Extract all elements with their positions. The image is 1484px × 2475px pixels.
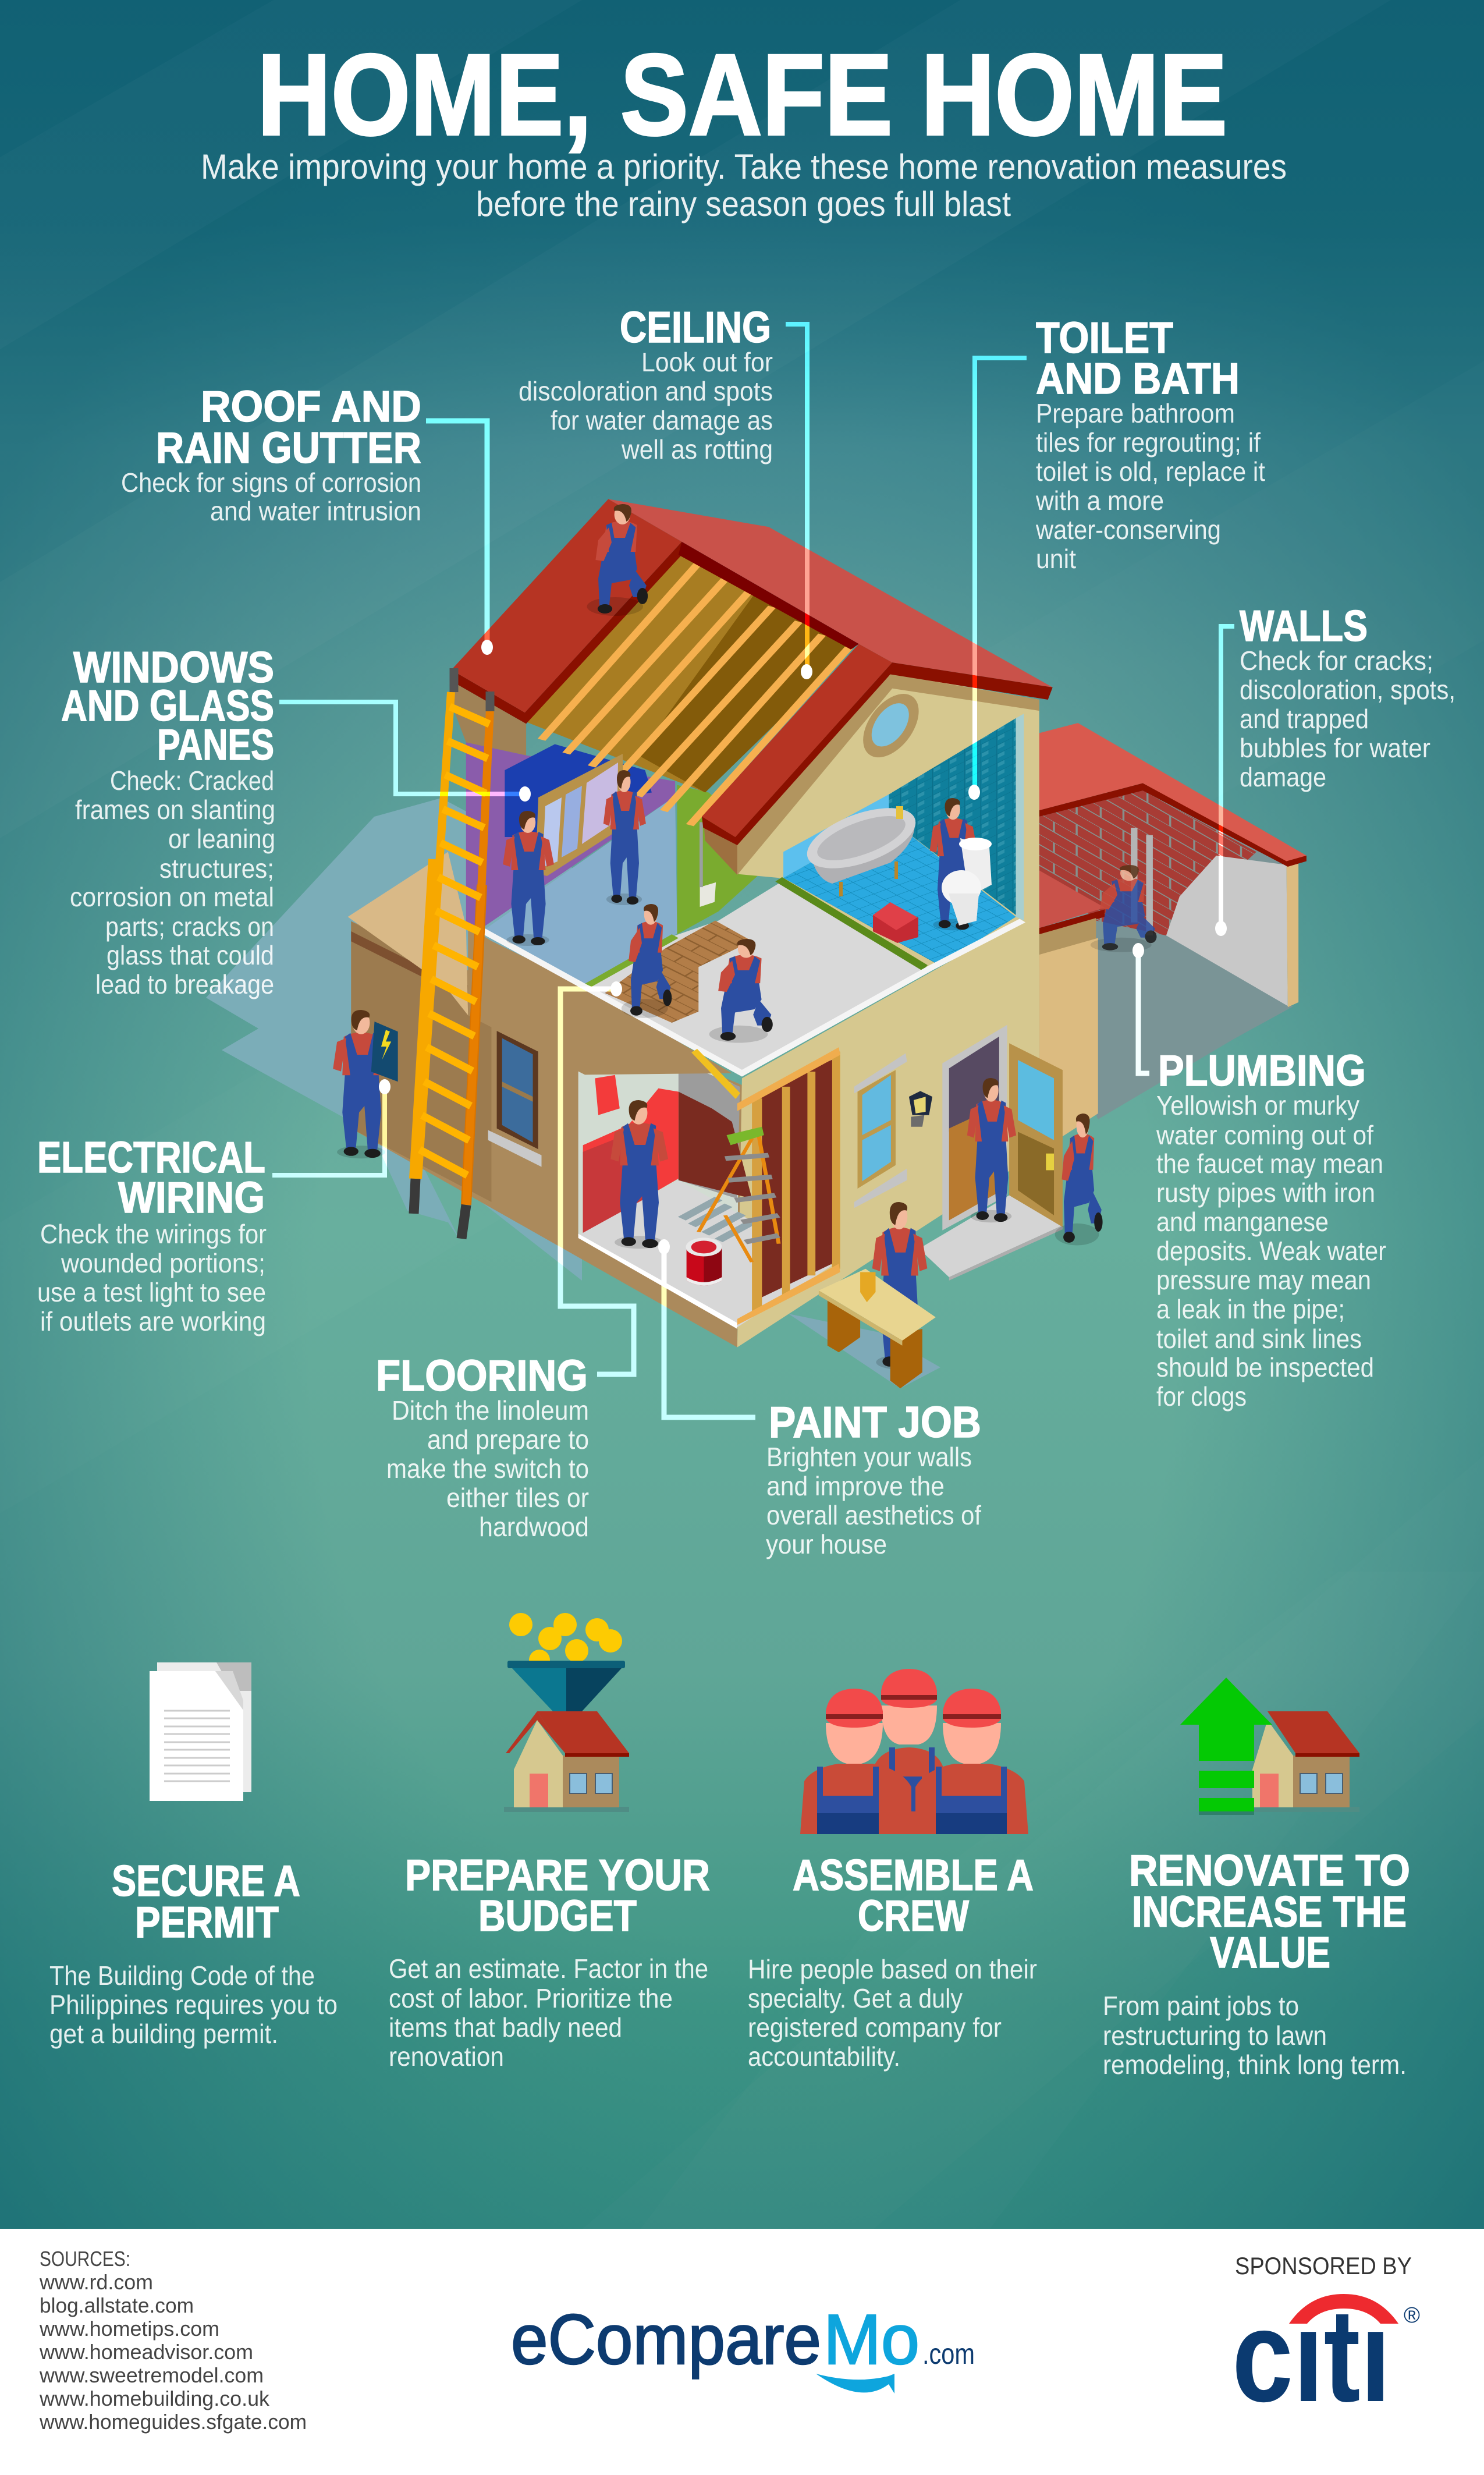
callout: plumbing: deposits. Weak water xyxy=(1156,1236,1386,1266)
cream gable wall xyxy=(735,673,1039,971)
step: renovate to increase the value: restructuring to lawn xyxy=(1103,2020,1327,2051)
logo: citi: citi xyxy=(1232,2282,1391,2429)
blue patch xyxy=(505,744,652,837)
door leaf xyxy=(1009,1043,1063,1227)
electrical box xyxy=(371,1022,398,1082)
callout: roof and rain gutter: Check for signs of corrosion xyxy=(121,467,421,498)
purple wall xyxy=(466,742,675,926)
callout: plumbing: the faucet may mean xyxy=(1156,1148,1383,1179)
crew: right xyxy=(915,1689,1028,1834)
callout: toilet and bath: unit xyxy=(1036,544,1076,574)
callout: windows and glass panes: structures; xyxy=(159,853,274,884)
wood flooring xyxy=(605,921,752,1023)
callout: windows and glass panes: Check: Cracked xyxy=(110,765,274,796)
step: assemble a crew: CREW xyxy=(858,1891,969,1940)
second storey xyxy=(348,499,1053,1075)
worker: floor 1 xyxy=(622,904,672,1018)
worker: bath xyxy=(930,798,977,930)
callout: flooring: either tiles or xyxy=(446,1483,589,1513)
ledge xyxy=(348,852,468,1015)
callout: paint job: overall aesthetics of xyxy=(766,1500,981,1530)
callout: walls: damage xyxy=(1240,762,1326,792)
worker: kneeling by door xyxy=(1055,1114,1103,1246)
sponsored by: SPONSORED BY xyxy=(1235,2252,1412,2279)
crew: left xyxy=(800,1689,911,1834)
white floor rim xyxy=(481,921,1023,1073)
callout: windows and glass panes: AND GLASS xyxy=(61,681,274,730)
callout: flooring: hardwood xyxy=(479,1512,589,1542)
step: prepare your budget xyxy=(389,1850,710,2072)
callout: plumbing: and manganese xyxy=(1156,1207,1329,1237)
blue floor xyxy=(481,796,677,985)
door opening xyxy=(942,1025,1007,1231)
logo: eCompareMo: eCompare xyxy=(511,2300,821,2379)
callout: windows and glass panes: lead to breakage xyxy=(95,969,274,999)
right window xyxy=(854,1054,907,1208)
sources: www.homeguides.sfgate.com xyxy=(39,2410,307,2434)
icon: value house xyxy=(1234,1711,1359,1812)
worker: plumber xyxy=(1091,865,1157,952)
callout: toilet and bath: tiles for regrouting; if xyxy=(1036,427,1261,458)
toilet xyxy=(942,838,992,926)
callout: walls: bubbles for water xyxy=(1240,733,1430,763)
callout: plumbing: should be inspected xyxy=(1156,1352,1374,1382)
worker: carpenter xyxy=(872,1202,927,1370)
callout: ceiling: CEILING xyxy=(620,303,771,352)
callout: paint job: and improve the xyxy=(766,1471,945,1501)
callout: ceiling: discoloration and spots xyxy=(519,376,773,406)
coins xyxy=(509,1613,622,1671)
callout: electrical wiring: wounded portions; xyxy=(61,1248,265,1278)
step: assemble a crew: Hire people based on their xyxy=(748,1954,1037,1984)
callout: flooring: and prepare to xyxy=(427,1424,589,1455)
callout: flooring: Ditch the linoleum xyxy=(392,1395,589,1426)
icon: green arrow xyxy=(1180,1678,1272,1815)
paint bucket xyxy=(686,1238,722,1285)
sources: www.hometips.com xyxy=(39,2317,219,2341)
step ladder xyxy=(698,1127,779,1262)
icon: budget xyxy=(504,1613,629,1812)
worker: electrical xyxy=(333,1010,390,1158)
callout: electrical wiring xyxy=(37,1133,267,1336)
callout: plumbing: a leak in the pipe; xyxy=(1156,1294,1345,1324)
step xyxy=(919,1195,1063,1277)
callout: windows and glass panes: corrosion on metal xyxy=(70,882,274,912)
step: secure a permit: Philippines requires you to xyxy=(49,1990,338,2020)
crew: centre xyxy=(873,1669,944,1834)
step: assemble a crew: specialty. Get a duly xyxy=(748,1983,963,2013)
house illustration xyxy=(206,499,1307,1388)
callout: walls: and trapped xyxy=(1240,704,1369,734)
callout: plumbing: rusty pipes with iron xyxy=(1156,1178,1375,1208)
worker: roof xyxy=(587,504,648,616)
callout: electrical wiring: WIRING xyxy=(118,1173,265,1222)
callout: electrical wiring: Check the wirings for xyxy=(40,1219,267,1249)
ladder xyxy=(414,668,490,1239)
callout: walls: Check for cracks; xyxy=(1240,646,1433,676)
stud wall xyxy=(737,1047,840,1325)
callout line: ceiling xyxy=(786,324,812,679)
step: prepare your budget: Get an estimate. Factor in the xyxy=(389,1953,708,1984)
step: renovate to increase the value xyxy=(1103,1846,1410,2080)
subtitle xyxy=(201,147,1287,224)
callout: toilet and bath: toilet is old, replace it xyxy=(1036,456,1265,487)
step: renovate to increase the value: RENOVATE TO xyxy=(1129,1846,1410,1895)
callout line: electrical xyxy=(272,1079,390,1175)
bathroom xyxy=(783,714,1024,965)
callout: roof and rain gutter: ROOF AND xyxy=(201,382,421,431)
step: prepare your budget: cost of labor. Prioritize the xyxy=(389,1983,673,2013)
callout: plumbing xyxy=(1156,1046,1386,1412)
roof: front band xyxy=(702,644,892,837)
callout: windows and glass panes: parts; cracks on xyxy=(105,912,274,942)
sources: www.sweetremodel.com xyxy=(39,2363,264,2387)
callout: electrical wiring: use a test light to see xyxy=(37,1277,266,1307)
step: secure a permit: The Building Code of the xyxy=(49,1960,315,1991)
left window xyxy=(488,1013,541,1167)
worker: window left xyxy=(503,811,554,946)
right wing xyxy=(1039,723,1307,1119)
icon: permit document xyxy=(150,1662,251,1801)
callout line: windows xyxy=(279,702,531,802)
roof: left plane xyxy=(452,499,682,712)
workbench xyxy=(819,1269,936,1388)
ground shadow: right wing xyxy=(1077,931,1293,1123)
callout: roof and rain gutter xyxy=(121,382,421,526)
paint room xyxy=(578,1005,832,1329)
callout: plumbing: pressure may mean xyxy=(1156,1265,1371,1295)
footer band xyxy=(0,2229,1484,2475)
subtitle: Make improving your home a priority. Take these home renovation measures xyxy=(201,147,1287,186)
callout: plumbing: PLUMBING xyxy=(1158,1046,1366,1095)
callout: flooring xyxy=(376,1351,589,1542)
logo: eCompareMo: Mo xyxy=(823,2300,919,2379)
callout: windows and glass panes: PANES xyxy=(157,720,274,769)
worker: door xyxy=(967,1078,1016,1222)
level tool xyxy=(691,1049,740,1099)
step: prepare your budget: PREPARE YOUR xyxy=(405,1850,710,1899)
callout: plumbing: toilet and sink lines xyxy=(1156,1324,1362,1354)
step: prepare your budget: renovation xyxy=(389,2041,504,2072)
step: secure a permit xyxy=(49,1856,338,2049)
callout: windows and glass panes: frames on slanting xyxy=(75,795,275,825)
callout: electrical wiring: if outlets are working xyxy=(40,1306,266,1336)
callout: paint job: your house xyxy=(766,1529,887,1559)
callout: toilet and bath xyxy=(1035,313,1265,574)
sources: www.homebuilding.co.uk xyxy=(39,2387,270,2410)
callout line: paint job xyxy=(658,1239,755,1417)
callout: ceiling xyxy=(519,303,773,464)
step: renovate to increase the value: From paint jobs to xyxy=(1103,1991,1299,2021)
callout: toilet and bath: AND BATH xyxy=(1036,354,1240,403)
oval window xyxy=(853,690,929,761)
ground shadow: ladder rays xyxy=(349,1106,460,1240)
step: assemble a crew: ASSEMBLE A xyxy=(793,1850,1034,1899)
subtitle: before the rainy season goes full blast xyxy=(476,185,1011,224)
window being carried xyxy=(535,754,624,876)
worker: window right xyxy=(603,770,646,905)
worker: floor 2 xyxy=(709,939,773,1043)
lower storey walls xyxy=(351,912,1098,1388)
step: secure a permit: get a building permit. xyxy=(49,2019,278,2049)
toolbox xyxy=(873,902,918,943)
attic xyxy=(526,545,858,825)
callout: walls: WALLS xyxy=(1240,601,1368,650)
logo: citi: ® xyxy=(1404,2303,1420,2328)
step: secure a permit: SECURE A xyxy=(112,1856,300,1905)
callout line: plumbing xyxy=(1132,943,1149,1073)
green skirting xyxy=(775,877,928,971)
workbench shadow xyxy=(789,1314,940,1388)
callout: windows and glass panes xyxy=(61,643,275,999)
worker: painter xyxy=(610,1100,668,1249)
callout: plumbing: Yellowish or murky xyxy=(1156,1090,1359,1121)
sources: www.rd.com xyxy=(39,2270,153,2294)
step: prepare your budget: BUDGET xyxy=(478,1891,637,1940)
roof: front fascia xyxy=(702,662,1053,845)
callout: paint job: Brighten your walls xyxy=(766,1442,972,1472)
callout: roof and rain gutter: RAIN GUTTER xyxy=(156,423,421,472)
roof: left fascia xyxy=(452,542,682,724)
callout: windows and glass panes: WINDOWS xyxy=(73,643,274,692)
callout: ceiling: well as rotting xyxy=(621,434,773,464)
callout: toilet and bath: TOILET xyxy=(1036,313,1173,362)
step: secure a permit: PERMIT xyxy=(135,1898,279,1946)
logo: eCompareMo xyxy=(511,2300,975,2394)
logo: eCompareMo: .com xyxy=(922,2338,975,2370)
callout: ceiling: for water damage as xyxy=(551,405,773,435)
step: assemble a crew: registered company for xyxy=(748,2012,1002,2043)
sources xyxy=(39,2247,307,2434)
callout line: flooring xyxy=(560,981,634,1374)
callout: flooring: make the switch to xyxy=(386,1453,589,1484)
wall lantern xyxy=(909,1091,932,1127)
callout line: walls xyxy=(1215,626,1234,936)
step: renovate to increase the value: INCREASE THE xyxy=(1132,1887,1407,1936)
ground shadow: left xyxy=(206,798,582,1281)
callout: walls xyxy=(1240,601,1455,792)
callout: walls: discoloration, spots, xyxy=(1240,675,1455,705)
outlet xyxy=(700,882,716,907)
grey floor xyxy=(585,884,926,1073)
callout: electrical wiring: ELECTRICAL xyxy=(37,1133,265,1182)
callout: roof and rain gutter: and water intrusion xyxy=(210,496,421,526)
left eave wall xyxy=(452,681,526,756)
callout: toilet and bath: water-conserving xyxy=(1035,515,1221,545)
title: HOME, SAFE HOME xyxy=(257,30,1227,159)
step: renovate to increase the value: VALUE xyxy=(1210,1928,1330,1977)
icon: crew xyxy=(800,1669,1028,1834)
callout: toilet and bath: Prepare bathroom xyxy=(1036,398,1235,428)
callout: ceiling: Look out for xyxy=(641,347,773,377)
green wall xyxy=(677,785,782,934)
callout: plumbing: for clogs xyxy=(1156,1381,1247,1412)
callout: windows and glass panes: or leaning xyxy=(168,824,275,854)
small house xyxy=(504,1711,629,1812)
callout: flooring: FLOORING xyxy=(376,1351,588,1400)
step: assemble a crew xyxy=(748,1850,1037,2072)
callout line: toilet xyxy=(968,358,1027,800)
bathtub xyxy=(800,796,923,896)
callout: plumbing: water coming out of xyxy=(1156,1120,1373,1150)
callout: paint job xyxy=(766,1398,981,1559)
step: renovate to increase the value: remodeling, think long term. xyxy=(1103,2050,1407,2080)
callout: paint job: PAINT JOB xyxy=(769,1398,981,1446)
roof: ridge shadow xyxy=(679,542,859,650)
sources: www.homeadvisor.com xyxy=(39,2340,253,2364)
funnel xyxy=(507,1661,625,1711)
sources: SOURCES: xyxy=(40,2247,130,2271)
step: prepare your budget: items that badly need xyxy=(389,2012,622,2043)
callout: windows and glass panes: glass that could xyxy=(106,940,274,970)
roof: rear plane xyxy=(608,499,1053,687)
step: assemble a crew: accountability. xyxy=(748,2041,900,2072)
callout: toilet and bath: with a more xyxy=(1035,485,1164,516)
sources: blog.allstate.com xyxy=(40,2293,194,2317)
callout line: roof xyxy=(426,421,493,655)
